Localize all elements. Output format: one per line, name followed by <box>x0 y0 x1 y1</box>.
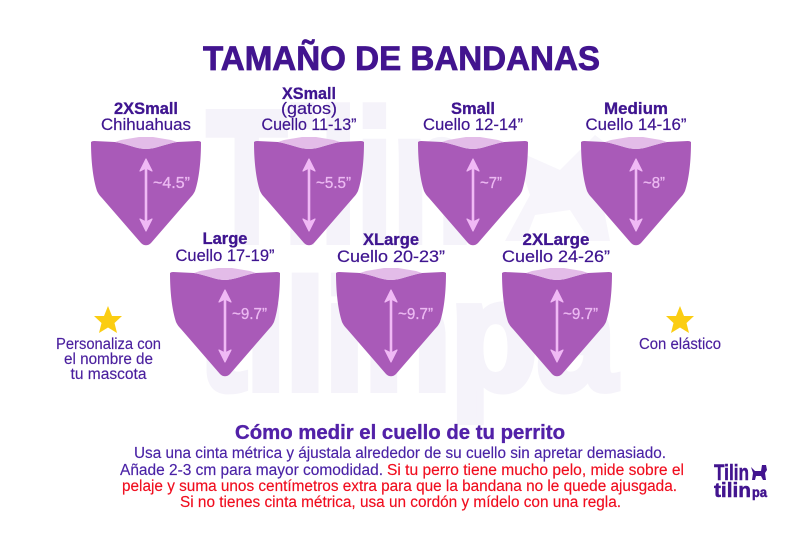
feature: personalized name: tu mascota <box>70 366 147 383</box>
size: 2XSmall: Chihuahuas <box>101 116 191 134</box>
size: 2XSmall: ~4.5” <box>153 175 190 192</box>
size: XSmall: ~5.5” <box>316 175 351 192</box>
size: 2XSmall: 2XSmall <box>114 100 178 118</box>
size: XSmall: (gatos) <box>281 100 337 118</box>
size: Medium: Cuello 14-16” <box>586 116 686 134</box>
feature: elastic: Con elástico <box>639 336 721 353</box>
size: Large: ~9.7” <box>232 306 267 323</box>
size: Large: Large <box>202 230 248 248</box>
brand logo: tilin <box>714 480 751 502</box>
size: XLarge: ~9.7” <box>398 306 433 323</box>
size: Small: Cuello 12-14” <box>423 116 523 134</box>
feature: personalized name: el nombre de <box>64 351 153 368</box>
title: TAMAÑO DE BANDANAS <box>203 40 600 78</box>
measuring instructions: pelaje y suma unos centímetros extra para que la bandana no le quede ajusgada. <box>122 478 677 495</box>
size: 2XSmall <box>91 100 201 245</box>
feature: personalized name <box>56 306 161 383</box>
size: Medium: ~8” <box>643 175 665 192</box>
measuring instructions <box>120 445 684 511</box>
size: XLarge: Cuello 20-23” <box>337 248 445 266</box>
size: Small <box>418 100 528 245</box>
size: 2XLarge: 2XLarge <box>522 231 590 249</box>
watermark logo <box>199 74 618 422</box>
size: Small: ~7” <box>480 175 502 192</box>
watermark logo: Tilin <box>207 74 472 281</box>
brand logo <box>714 460 767 502</box>
size: Large: Cuello 17-19” <box>176 247 274 265</box>
size: Large <box>170 230 280 376</box>
watermark logo: tilinpa <box>199 249 618 422</box>
feature: personalized name: Personaliza con <box>56 336 161 353</box>
size: Medium <box>581 100 691 245</box>
size: XLarge: XLarge <box>363 231 419 249</box>
size: Small: Small <box>451 100 495 118</box>
size: 2XLarge <box>502 231 612 376</box>
size: Medium: Medium <box>604 100 668 118</box>
measuring instructions: Si tu perro tiene mucho pelo, mide sobre el <box>387 462 684 479</box>
brand logo: Tilin <box>714 460 749 485</box>
measuring instructions: Usa una cinta métrica y ájustala alrededor de su cuello sin apretar demasiado. <box>134 445 666 462</box>
measuring instructions: Añade 2-3 cm para mayor comodidad. <box>120 462 383 479</box>
size: XSmall: Cuello 11-13” <box>262 116 356 134</box>
measuring instructions: Si no tienes cinta métrica, usa un cordón y mídelo con una regla. <box>180 494 621 511</box>
icon: dog <box>751 465 767 480</box>
size: XLarge <box>336 231 446 376</box>
feature: elastic <box>639 306 721 353</box>
size: 2XLarge: ~9.7” <box>563 306 598 323</box>
measuring heading: Cómo medir el cuello de tu perrito <box>235 422 565 444</box>
brand logo: pa <box>752 484 767 500</box>
size: 2XLarge: Cuello 24-26” <box>502 248 610 266</box>
size: XSmall: XSmall <box>282 85 336 103</box>
size: XSmall <box>254 85 364 245</box>
